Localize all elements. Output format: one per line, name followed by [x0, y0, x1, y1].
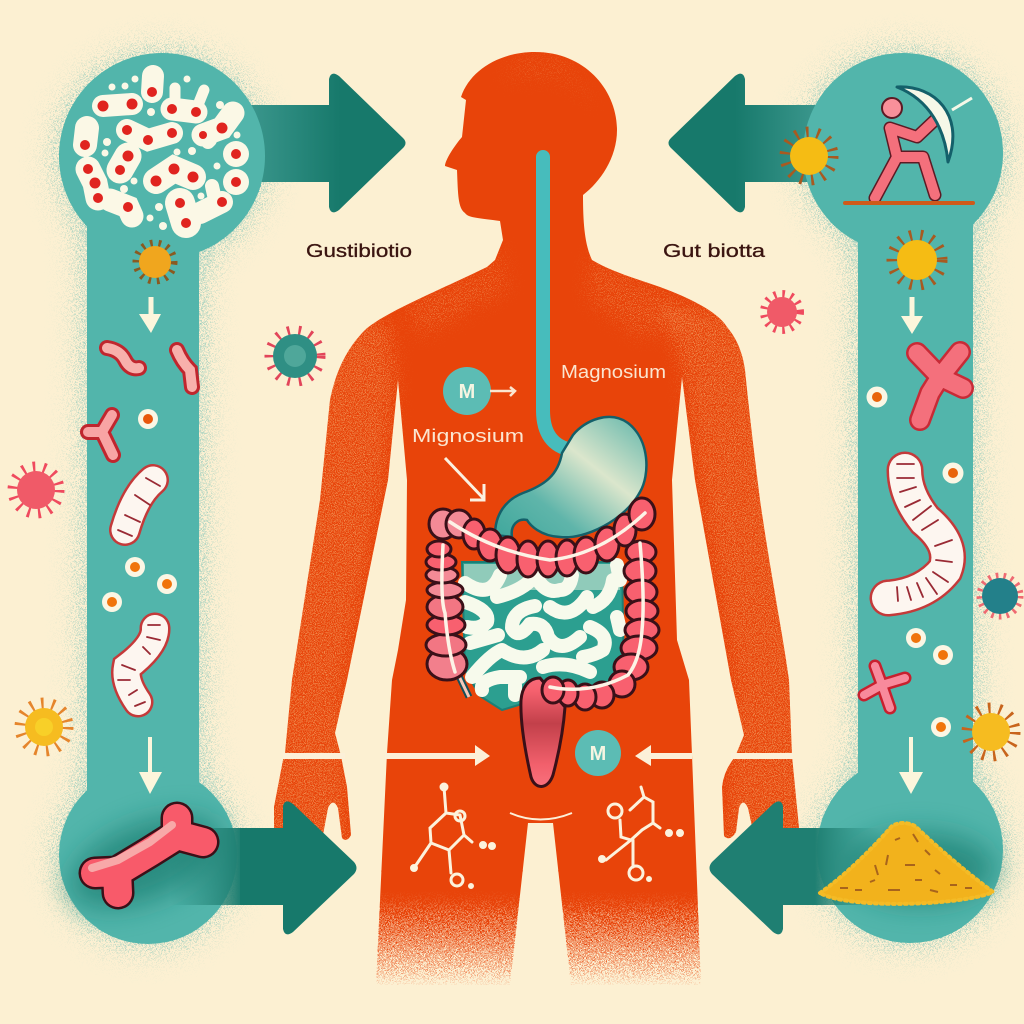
arrow down: [901, 297, 923, 334]
dots: [906, 628, 953, 665]
bacterium white segmented 1: [118, 478, 160, 536]
wrist band right: [731, 753, 793, 759]
label: Gustibiotio: Gustibiotio: [306, 241, 412, 261]
bacterium pink 2: [177, 350, 192, 387]
esophagus: [543, 157, 572, 450]
bacterium white large: [888, 464, 952, 601]
label: Magnosium: Magnosium: [561, 362, 666, 382]
bacterium branched large: [917, 352, 963, 420]
M circle lower: [575, 730, 621, 776]
panel: left teal pathway: [59, 53, 265, 944]
dots: [102, 557, 177, 612]
arrow: top right: [668, 74, 825, 212]
bacterium branched: [88, 415, 113, 455]
bacterium pink 1: [107, 348, 139, 368]
human body silhouette: [274, 52, 799, 985]
arrow down: [899, 737, 923, 794]
arrow: bottom left: [170, 801, 356, 934]
virus: yellow top: [785, 132, 833, 180]
bacteria cluster top left: [80, 76, 249, 230]
dot: [138, 409, 158, 429]
arrow: lower right: [635, 745, 692, 766]
shadow: bottom right: [845, 832, 995, 904]
dot: [931, 717, 951, 737]
virus: yellow: [137, 244, 173, 280]
shadow: bottom left: [57, 797, 233, 927]
stomach: [495, 417, 646, 537]
virus: teal: [980, 576, 1020, 616]
arrow: top left: [240, 74, 406, 212]
virus: pink: [13, 467, 59, 513]
stippled halo: left pathway: [59, 53, 265, 944]
appendix: [457, 672, 469, 697]
arrow: bottom right: [710, 801, 885, 934]
rectum: [521, 678, 565, 787]
molecule left: [412, 784, 494, 888]
wrist band left: [283, 753, 345, 759]
virus: yellow: [20, 703, 68, 751]
arrow down: [139, 737, 162, 794]
arrow: magnesium to gut: [445, 458, 484, 500]
small intestine: [462, 562, 624, 710]
arrow down: [139, 297, 161, 333]
free microbes left: [13, 331, 320, 751]
stippled halo: right pathway: [803, 53, 1003, 943]
label: Gut biotta: Gut biotta: [663, 241, 766, 261]
left band microbes: [88, 244, 203, 893]
bacterium white segmented 2: [118, 625, 160, 706]
panel: right teal pathway: [803, 53, 1003, 943]
bacterium large pink: [92, 818, 203, 893]
virus: teal: [270, 331, 320, 381]
label: Mignosium: Mignosium: [412, 426, 524, 446]
yellow powder pile: [820, 823, 993, 904]
colon highlight lines: [442, 513, 645, 689]
magnesium M circle with arrow: [443, 367, 515, 415]
grain on body edges: [260, 52, 810, 860]
dots: [866, 386, 964, 484]
bacterium pink small: [864, 666, 905, 708]
right panel illustrations: [764, 87, 1020, 904]
magnesium M circle with arrow: M: [459, 381, 475, 403]
molecule right: [600, 787, 682, 880]
icon: figure with pick: [845, 87, 973, 203]
virus: yellow: [892, 235, 942, 285]
arrow: lower left: [385, 745, 490, 766]
virus: orange right: [967, 708, 1015, 756]
large intestine: [426, 498, 659, 710]
crotch highlight: [510, 813, 572, 820]
virus: pink: [764, 294, 800, 330]
M circle lower: M: [590, 743, 606, 765]
